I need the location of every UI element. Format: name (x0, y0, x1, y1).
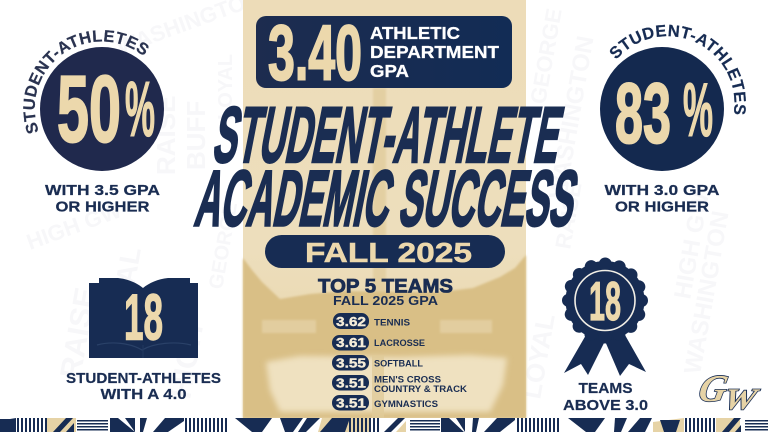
background watermark typography: RAISE (151, 96, 181, 175)
caption (563, 380, 648, 414)
GW logo (695, 368, 762, 416)
percentage: 83 (615, 66, 671, 162)
stat: 83% of student-athletes (600, 24, 746, 216)
row: softball: 3.55 (336, 356, 366, 370)
GPA label: DEPARTMENT (370, 42, 499, 62)
row: gymnastics: GYMNASTICS (374, 399, 438, 410)
row: men's cross country and track (332, 374, 467, 395)
top 5 teams list (318, 276, 467, 410)
background watermark typography: HIGH (164, 322, 210, 401)
ribbon count: 18 (589, 270, 621, 332)
stat: 50% of student-athletes: % (125, 65, 155, 153)
GPA label: GPA (370, 61, 409, 81)
stat: 50% of student-athletes (23, 30, 164, 216)
caption: WITH 3.0 GPA (604, 182, 720, 199)
background watermark typography: HIGH GW (669, 190, 715, 301)
panel: centre photo background (243, 0, 526, 418)
caption: WITH A 4.0 (100, 387, 186, 403)
caption (45, 182, 160, 216)
background watermark typography: WASHINGTON (679, 209, 735, 376)
GPA label: ATHLETIC (370, 23, 460, 43)
fall 2025 pill (265, 235, 505, 268)
background watermark typography: BUFF (181, 101, 211, 170)
background watermark typography: RAISE (550, 180, 587, 251)
caption: OR HIGHER (615, 198, 709, 216)
title (190, 91, 585, 242)
background watermark typography: HIGH GW (23, 197, 125, 255)
row: men's cross country and track: MEN'S CROSS (374, 374, 441, 386)
curved label: STUDENT-ATHLETES (610, 24, 746, 114)
background watermark typography: LOYAL (215, 54, 237, 120)
caption: WITH 3.5 GPA (45, 182, 160, 199)
background watermark typography: LOYAL (100, 245, 147, 341)
stat: 83% of student-athletes: % (683, 68, 713, 153)
background watermark typography: GEORGE (525, 6, 567, 106)
row: men's cross country and track: COUNTRY & TRACK (374, 384, 467, 395)
caption: STUDENT-ATHLETES (66, 371, 221, 387)
circle (40, 47, 164, 171)
caption: TEAMS (578, 380, 632, 397)
list subheading: FALL 2025 GPA (333, 293, 439, 308)
row: lacrosse: LACROSSE (374, 338, 425, 349)
GW logo: G (695, 368, 732, 410)
row: men's cross country and track: 3.51 (336, 376, 366, 390)
bottom pattern strip (0, 418, 768, 432)
stat: teams above 3.0 (563, 261, 648, 414)
icon: open book (89, 278, 198, 358)
caption: ABOVE 3.0 (563, 397, 648, 414)
circle (600, 47, 724, 171)
GPA label (370, 23, 499, 81)
row: gymnastics: 3.51 (336, 396, 366, 410)
row: tennis: 3.62 (336, 314, 366, 329)
caption: OR HIGHER (56, 198, 150, 216)
GPA box (256, 8, 512, 96)
list heading: TOP 5 TEAMS (318, 276, 453, 298)
background watermark typography: GEORGE (205, 201, 242, 291)
background watermark typography: LOYAL (516, 311, 561, 401)
row: softball (332, 355, 423, 370)
background watermark typography: RAISE (54, 285, 103, 381)
caption (604, 182, 720, 216)
row: lacrosse (332, 335, 425, 350)
caption (66, 371, 221, 403)
book count: 18 (124, 280, 163, 354)
fall 2025 pill: FALL 2025 (305, 237, 472, 268)
row: tennis (333, 313, 410, 329)
row: softball: SOFTBALL (374, 358, 423, 370)
background watermark typography: WASHINGTON (544, 34, 600, 201)
row: lacrosse: 3.61 (336, 335, 366, 350)
percentage: 50 (57, 56, 121, 162)
row: tennis: TENNIS (374, 318, 410, 328)
GPA value: 3.40 (268, 8, 362, 96)
row: gymnastics (332, 395, 438, 410)
icon: ribbon (564, 261, 646, 376)
curved label: STUDENT-ATHLETES (23, 30, 149, 134)
stat: student-athletes with a 4.0 (66, 278, 221, 403)
GW logo: W (721, 382, 762, 416)
